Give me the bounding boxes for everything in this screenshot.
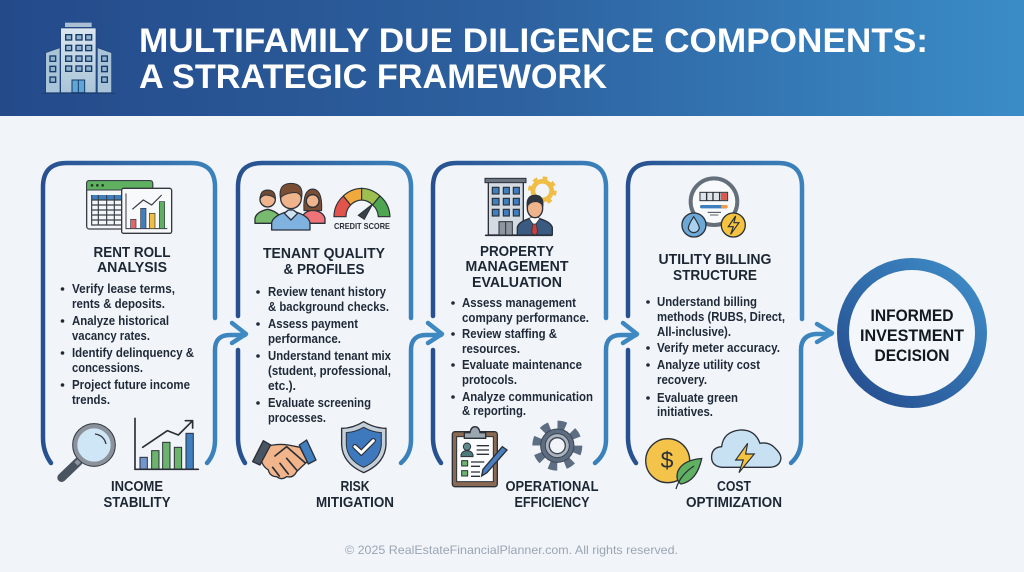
- heading: STRUCTURE: [673, 267, 757, 284]
- icon: clipboard checklist: [452, 427, 507, 487]
- heading: [263, 245, 385, 278]
- bullet list: Project future income: [72, 378, 190, 392]
- heading: MANAGEMENT: [466, 258, 568, 275]
- title: A STRATEGIC FRAMEWORK: [139, 58, 607, 96]
- panel: utility billing structure: [628, 163, 832, 511]
- icon: gear: [536, 425, 578, 467]
- bullet list: [646, 295, 785, 419]
- title: MULTIFAMILY DUE DILIGENCE COMPONENTS:: [139, 22, 928, 60]
- bullet list: performance.: [268, 332, 341, 346]
- label: operational efficiency: [506, 479, 599, 511]
- bullet list: Verify meter accuracy.: [657, 341, 780, 355]
- label: cost optimization: OPTIMIZATION: [686, 495, 782, 511]
- label: risk mitigation: MITIGATION: [316, 495, 394, 511]
- bullet list: resources.: [462, 342, 520, 356]
- label: risk mitigation: [316, 479, 394, 511]
- heading: PROPERTY: [480, 243, 554, 260]
- heading: UTILITY BILLING: [658, 251, 772, 268]
- bullet list: initiatives.: [657, 405, 713, 419]
- bullet list: recovery.: [657, 373, 707, 387]
- heading: EVALUATION: [472, 274, 562, 291]
- bullet list: Evaluate maintenance: [462, 358, 582, 372]
- label: operational efficiency: OPERATIONAL: [506, 479, 599, 495]
- panel: tenant quality and profiles: [238, 163, 442, 511]
- icon: cloud with lightning: [712, 430, 781, 473]
- bullet list: concessions.: [72, 361, 143, 375]
- bullet list: [451, 296, 593, 418]
- heading: [94, 244, 170, 276]
- bullet list: [61, 282, 194, 407]
- bullet list: vacancy rates.: [72, 329, 150, 343]
- callout: informed investment decision: [843, 264, 981, 402]
- bullet list: Analyze historical: [72, 314, 169, 328]
- callout: informed investment decision: DECISION: [874, 347, 950, 365]
- heading: [466, 243, 568, 291]
- heading: RENT ROLL: [94, 244, 170, 261]
- panel frame and arrow to decision: [628, 163, 832, 463]
- label: operational efficiency: EFFICIENCY: [514, 495, 590, 511]
- icon: apartment building: [42, 23, 115, 93]
- bullet list: trends.: [72, 393, 110, 407]
- label: risk mitigation: RISK: [340, 479, 370, 495]
- label: cost optimization: COST: [717, 479, 751, 495]
- bullet list: etc.).: [268, 379, 296, 393]
- bullet list: Analyze communication: [462, 390, 593, 404]
- panel: rent roll analysis: [43, 163, 246, 511]
- icon: credit score gauge: CREDIT SCORE: [334, 221, 390, 231]
- bullet list: Evaluate screening: [268, 396, 371, 410]
- bullet list: Analyze utility cost: [657, 358, 761, 372]
- icon: shield: [342, 422, 386, 473]
- heading: & PROFILES: [284, 261, 364, 278]
- bullet list: Identify delinquency &: [72, 346, 194, 360]
- icon: manager with building and gear: [485, 178, 555, 235]
- bullet list: rents & deposits.: [72, 297, 165, 311]
- header banner: [0, 0, 1024, 116]
- icon: growth chart: [135, 418, 198, 469]
- icon: coin with leaf: $: [661, 447, 674, 473]
- icon: utility meter: [682, 178, 745, 237]
- bullet list: Review tenant history: [268, 285, 386, 299]
- heading: [658, 251, 772, 284]
- bullet list: protocols.: [462, 373, 517, 387]
- bullet list: Understand tenant mix: [268, 349, 391, 363]
- bullet list: Evaluate green: [657, 391, 738, 405]
- bullet list: Assess management: [462, 296, 577, 310]
- bullet list: Review staffing &: [462, 327, 557, 341]
- callout: informed investment decision: INFORMED: [870, 307, 954, 325]
- panel frame and arrow to property management: [238, 163, 442, 463]
- title: [139, 22, 928, 96]
- label: income stability: INCOME: [111, 479, 163, 495]
- icon: coin with leaf: [646, 439, 702, 489]
- label: income stability: STABILITY: [104, 495, 171, 511]
- bullet list: All-inclusive).: [657, 325, 731, 339]
- bullet list: Assess payment: [268, 317, 359, 331]
- bullet list: & background checks.: [268, 300, 389, 314]
- bullet list: & reporting.: [462, 404, 526, 418]
- footer copyright: © 2025 RealEstateFinancialPlanner.com. All rights reserved.: [345, 543, 678, 557]
- heading: TENANT QUALITY: [263, 245, 385, 262]
- icon: magnifying glass: [62, 424, 115, 478]
- bullet list: Understand billing: [657, 295, 757, 309]
- icon: tenant group: [255, 183, 325, 230]
- panel frame and arrow to tenant quality: [43, 163, 246, 463]
- bullet list: processes.: [268, 411, 326, 425]
- bullet list: methods (RUBS, Direct,: [657, 310, 785, 324]
- icon: credit score gauge: [334, 188, 390, 231]
- panel frame and arrow to utility billing: [433, 163, 637, 463]
- bullet list: Verify lease terms,: [72, 282, 175, 296]
- bullet list: [256, 285, 391, 425]
- bullet list: (student, professional,: [268, 364, 391, 378]
- icon: handshake: [253, 440, 316, 479]
- label: income stability: [104, 479, 171, 511]
- panel: property management evaluation: [433, 163, 637, 511]
- heading: ANALYSIS: [97, 259, 167, 276]
- label: cost optimization: [686, 479, 782, 511]
- callout: informed investment decision: INVESTMENT: [860, 327, 964, 345]
- bullet list: company performance.: [462, 311, 589, 325]
- icon: spreadsheet with chart: [87, 181, 172, 233]
